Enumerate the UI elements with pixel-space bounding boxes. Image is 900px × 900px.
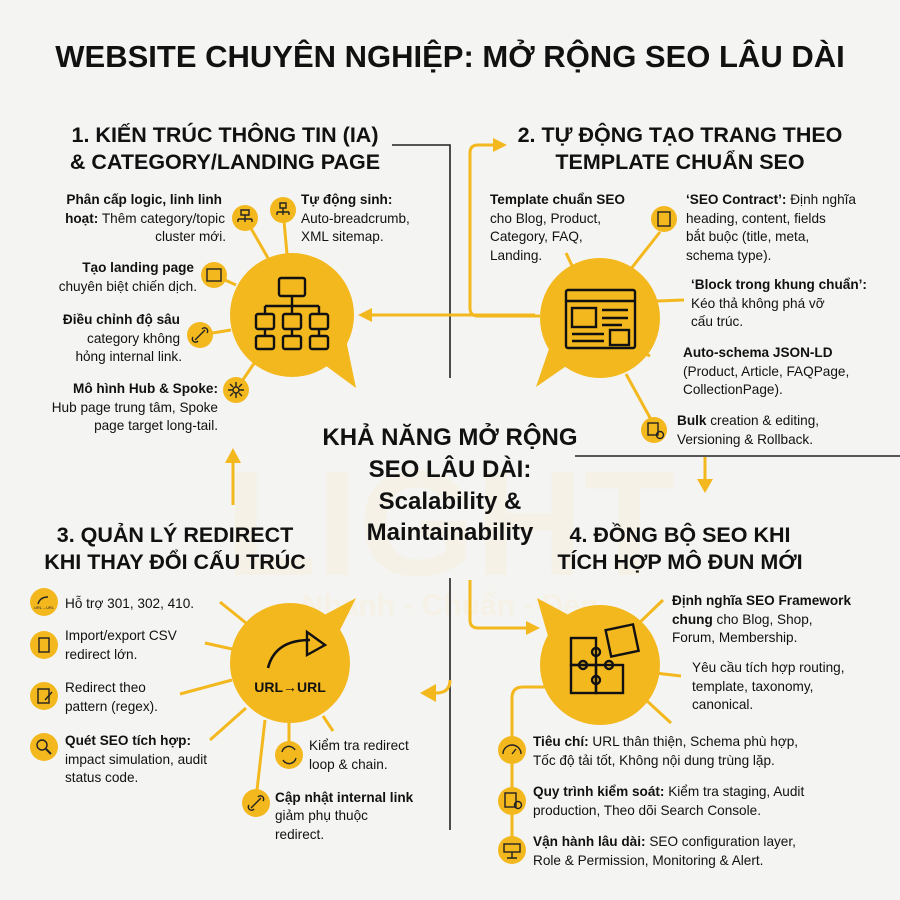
item 4e [498, 834, 796, 868]
item 4c: Tiêu chí: URL thân thiện, Schema phù hợp, [533, 734, 798, 749]
item 3e: Kiểm tra redirect [309, 738, 409, 753]
item 2b [651, 192, 856, 263]
title: WEBSITE CHUYÊN NGHIỆP: MỞ RỘNG SEO LÂU DÀI [55, 38, 845, 74]
panel 3 [30, 522, 414, 842]
heading 3: 3. QUẢN LÝ REDIRECT [57, 522, 293, 547]
item 1e: Hub page trung tâm, Spoke [52, 400, 218, 415]
item 1d [63, 312, 213, 364]
item 1a: hoạt: Thêm category/topic [65, 211, 225, 226]
connectors [225, 138, 900, 830]
item 3f: giảm phụ thuộc [275, 808, 368, 823]
item 1b: Auto-breadcrumb, [301, 211, 410, 226]
item 2c: cấu trúc. [691, 314, 743, 329]
watermark: LIGHT [225, 439, 675, 607]
center text: Maintainability [367, 519, 534, 546]
item 1c: Tạo landing page [82, 260, 194, 275]
item 4c [498, 734, 798, 768]
item 3c: Redirect theo [65, 680, 146, 695]
item 3b: redirect lớn. [65, 647, 137, 662]
item 2a: Template chuẩn SEO [490, 192, 625, 207]
item 4b: template, taxonomy, [692, 679, 813, 694]
item 3a: Hỗ trợ 301, 302, 410. [65, 596, 194, 611]
item 2a: Landing. [490, 248, 542, 263]
panel 2 [490, 122, 867, 447]
item 2c [691, 277, 867, 329]
item 2e [641, 413, 819, 447]
item 4a: chung cho Blog, Shop, [672, 612, 813, 627]
item 1c [59, 260, 227, 294]
item 4a [672, 593, 851, 645]
item 3f: redirect. [275, 827, 324, 842]
heading 4: 4. ĐỒNG BỘ SEO KHI [569, 522, 791, 547]
bubble 1 [230, 253, 356, 388]
item 1a: Phân cấp logic, linh linh [66, 192, 222, 207]
item 4c: Tốc độ tải tốt, Không nội dung trùng lặp. [533, 753, 775, 768]
heading 1: 1. KIẾN TRÚC THÔNG TIN (IA) [72, 122, 378, 147]
item 2b: ‘SEO Contract’: Định nghĩa [686, 192, 856, 207]
item 3f [242, 789, 414, 842]
item 1d: category không [87, 331, 180, 346]
item 3a [30, 588, 194, 616]
item 2c: ‘Block trong khung chuẩn’: [691, 277, 867, 292]
item 2d: (Product, Article, FAQPage, [683, 364, 849, 379]
item 1d: Điều chỉnh độ sâu [63, 312, 180, 327]
heading 2: TEMPLATE CHUẨN SEO [555, 149, 805, 174]
center text: Scalability & [379, 488, 521, 515]
heading 4 [557, 522, 803, 574]
item 4b: canonical. [692, 697, 753, 712]
heading 3 [44, 522, 306, 574]
item 4d: Quy trình kiểm soát: Kiểm tra staging, Audit [533, 784, 804, 799]
bubble 3 [230, 598, 356, 723]
item 3a: URL→URL [34, 605, 55, 610]
item 1c: chuyên biệt chiến dịch. [59, 279, 197, 294]
item 2a: Category, FAQ, [490, 229, 583, 244]
item 3e: loop & chain. [309, 757, 388, 772]
item 3d [30, 733, 207, 785]
panel 4 [498, 522, 851, 868]
center text [322, 422, 578, 546]
item 2a [490, 192, 625, 263]
item 3c [30, 680, 158, 714]
panel 1 [52, 122, 410, 433]
item 2d: Auto-schema JSON-LD [683, 345, 833, 360]
item 3e [275, 738, 409, 772]
heading 1: & CATEGORY/LANDING PAGE [70, 150, 380, 174]
item 2b: bắt buộc (title, meta, [686, 229, 809, 244]
bubble 4 [537, 598, 660, 725]
item 3d: status code. [65, 770, 138, 785]
item 2e: Versioning & Rollback. [677, 432, 813, 447]
item 3b: Import/export CSV [65, 628, 177, 643]
item 1a: cluster mới. [155, 229, 226, 244]
heading 4: TÍCH HỢP MÔ ĐUN MỚI [557, 549, 803, 574]
bubble 2 [536, 258, 660, 387]
item 4e: Vận hành lâu dài: SEO configuration layer, [533, 834, 796, 849]
center text: KHẢ NĂNG MỞ RỘNG [322, 422, 578, 451]
item 4e: Role & Permission, Monitoring & Alert. [533, 853, 763, 868]
watermark: Nhanh - Chuẩn - Đẹp [302, 589, 598, 622]
item 2e: Bulk creation & editing, [677, 413, 819, 428]
center text: SEO LÂU DÀI: [369, 455, 531, 483]
item 2b: schema type). [686, 248, 771, 263]
item 4b [692, 660, 844, 712]
item 3f: Cập nhật internal link [275, 790, 414, 805]
item 2d [683, 345, 849, 397]
item 2d: CollectionPage). [683, 382, 783, 397]
heading 2 [518, 122, 842, 174]
item 1b [270, 192, 410, 244]
item 1d: hỏng internal link. [75, 349, 182, 364]
item 2b: heading, content, fields [686, 211, 826, 226]
item 4d [498, 784, 804, 818]
bubble 3: URL→URL [254, 679, 326, 695]
item 4b: Yêu cầu tích hợp routing, [692, 660, 844, 675]
item 1e: page target long-tail. [94, 418, 218, 433]
item 1b: Tự động sinh: [301, 192, 392, 207]
item 2c: Kéo thả không phá vỡ [691, 296, 825, 311]
item 1a [65, 192, 258, 244]
item 3c: pattern (regex). [65, 699, 158, 714]
item 2a: cho Blog, Product, [490, 211, 601, 226]
item 1e: Mô hình Hub & Spoke: [73, 381, 218, 396]
item 4a: Định nghĩa SEO Framework [672, 593, 851, 608]
item 1b: XML sitemap. [301, 229, 384, 244]
heading 1 [70, 122, 380, 174]
item 3d: Quét SEO tích hợp: [65, 733, 191, 748]
item 1e [52, 377, 249, 433]
heading 2: 2. TỰ ĐỘNG TẠO TRANG THEO [518, 122, 842, 147]
item 3d: impact simulation, audit [65, 752, 207, 767]
item 3b [30, 628, 177, 662]
item 4d: production, Theo dõi Search Console. [533, 803, 761, 818]
heading 3: KHI THAY ĐỔI CẤU TRÚC [44, 549, 306, 574]
item 4a: Forum, Membership. [672, 630, 797, 645]
